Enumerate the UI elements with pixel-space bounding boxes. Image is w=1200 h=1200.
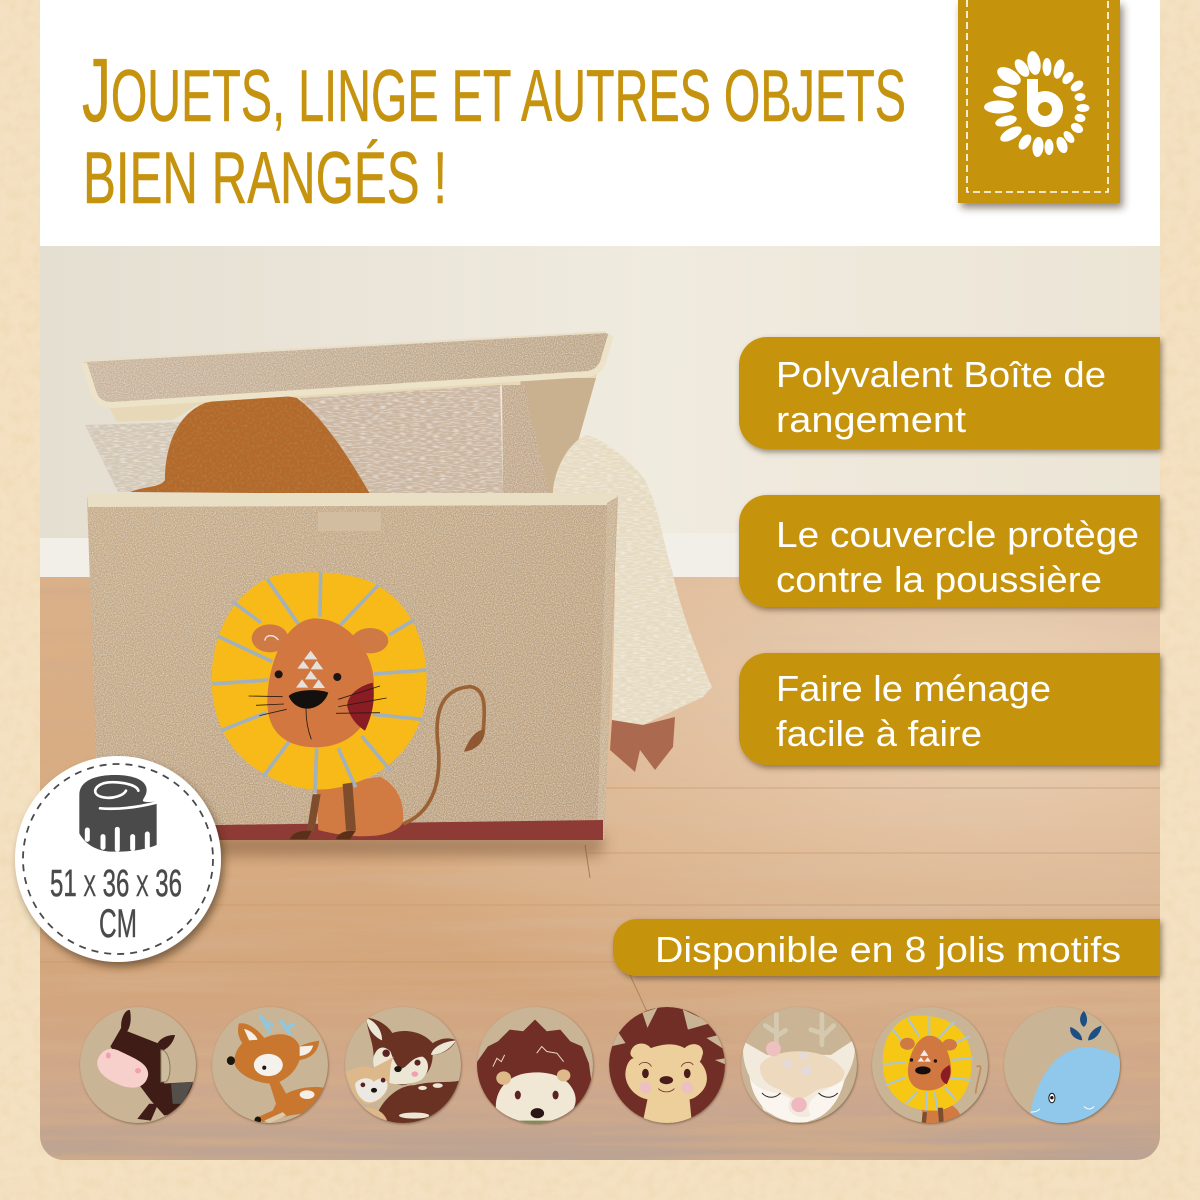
title: BIEN RANGÉS ! xyxy=(83,138,447,219)
wooden floor xyxy=(40,577,1160,1160)
dimensions badge: 51 X 36 X 36 xyxy=(50,863,182,905)
motif: hedgehog xyxy=(476,1007,594,1126)
feature pill: ménage: facile à faire xyxy=(776,713,982,754)
white header band xyxy=(40,0,1160,246)
feature pill: ménage xyxy=(739,653,1160,765)
feature pill: couvercle: contre la poussière xyxy=(776,559,1102,600)
product photo xyxy=(40,246,1160,1160)
motifs pill xyxy=(613,919,1160,976)
feature pill: polyvalent: rangement xyxy=(776,399,966,440)
lid underside xyxy=(108,374,597,443)
lid xyxy=(84,332,611,405)
icon: measuring tape xyxy=(79,775,157,852)
feature pill: couvercle xyxy=(739,495,1160,607)
feature pill: couvercle: Le couvercle protège xyxy=(776,514,1139,555)
wall xyxy=(40,246,1160,581)
logo tag xyxy=(958,0,1120,203)
feature pill: polyvalent xyxy=(739,337,1160,449)
motifs pill: Disponible en 8 jolis motifs xyxy=(655,929,1121,970)
motif: horse xyxy=(80,1007,196,1123)
storage box xyxy=(84,332,712,840)
motif: deer family xyxy=(345,1007,461,1124)
baseboard xyxy=(40,533,739,577)
burgundy trim xyxy=(215,820,603,840)
lion appliqué xyxy=(212,572,485,839)
title xyxy=(82,41,906,219)
feature pill: ménage: Faire le ménage xyxy=(776,668,1051,709)
motif: fawn xyxy=(212,1007,328,1123)
dimensions badge xyxy=(15,756,221,962)
motif: hedgehog portrait xyxy=(609,1007,727,1124)
motif: whale xyxy=(1004,1007,1121,1124)
box front panel xyxy=(87,495,618,840)
icon: sunflower logo xyxy=(984,50,1090,157)
box contents xyxy=(85,378,712,772)
dimensions badge: CM xyxy=(99,902,137,946)
box shadow on floor xyxy=(80,835,606,856)
motif: lion xyxy=(872,1007,988,1124)
feature pill: polyvalent: Polyvalent Boîte de xyxy=(776,354,1106,395)
motif: doe xyxy=(741,1007,857,1123)
